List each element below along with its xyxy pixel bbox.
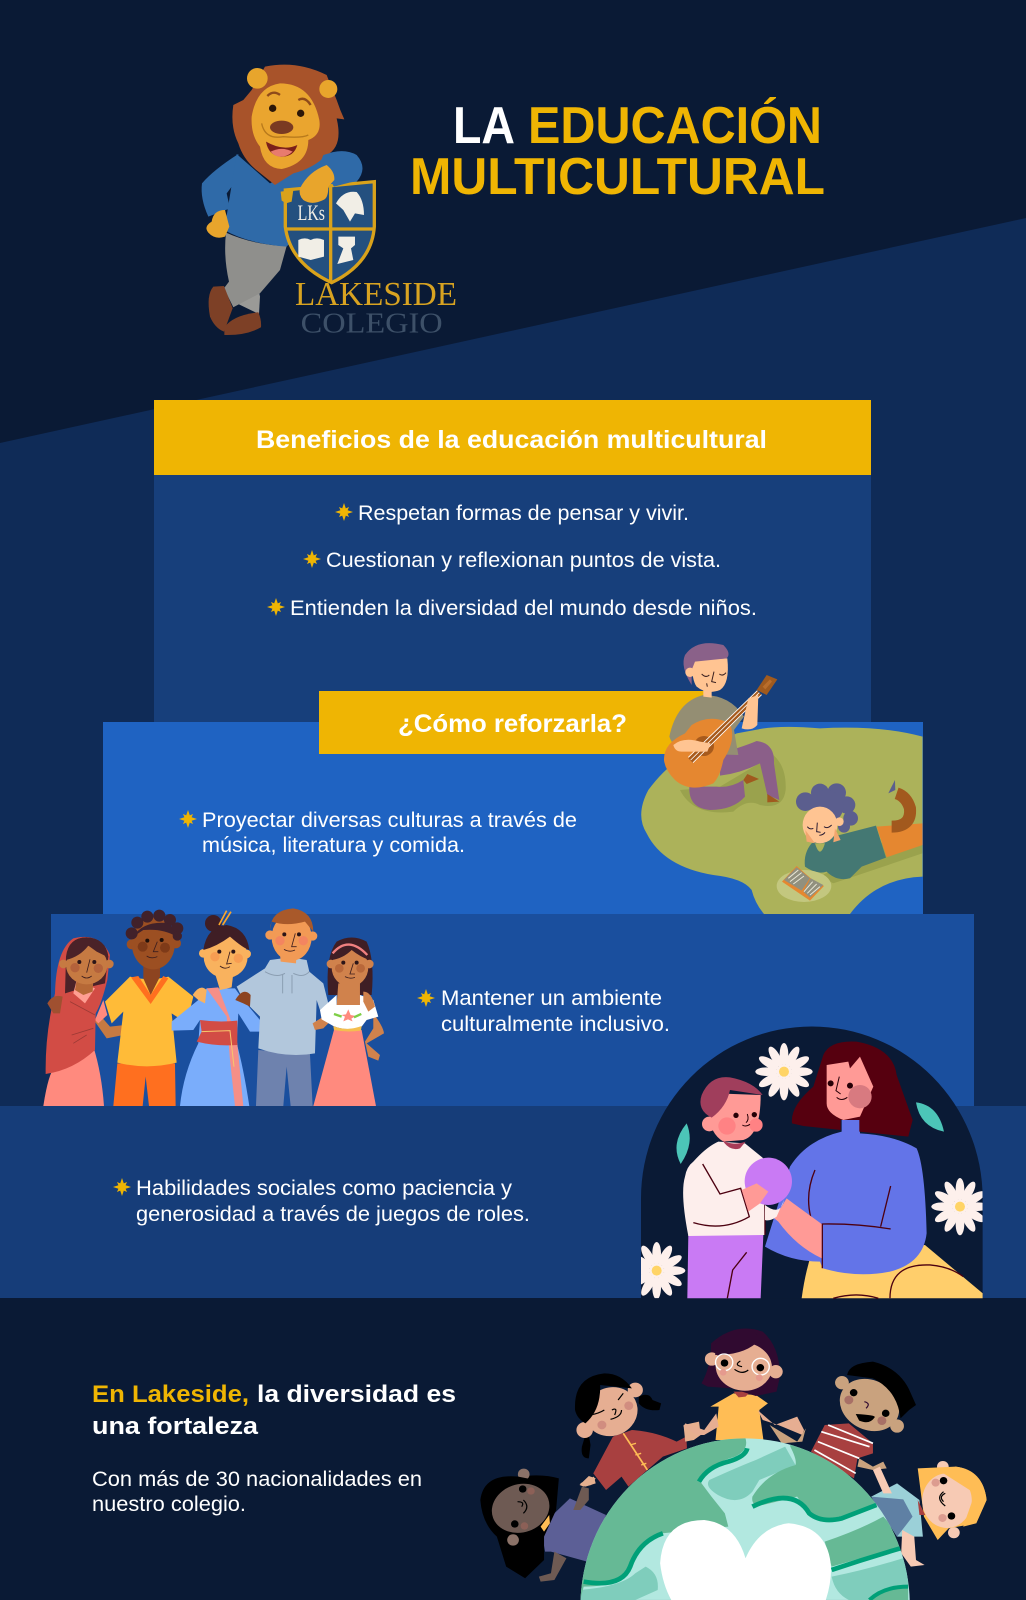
illustration: children with guitar and book	[641, 643, 923, 914]
panel: social skills	[0, 1106, 1026, 1299]
blonde child	[871, 1461, 987, 1567]
title: LA	[453, 97, 515, 155]
child face	[803, 807, 837, 843]
diagonal background band	[0, 218, 1026, 1299]
child with dark skin	[480, 1469, 606, 1582]
title	[410, 97, 825, 206]
reading child	[796, 780, 923, 879]
mascot face	[252, 83, 320, 169]
mascot left hand	[206, 210, 229, 238]
bullet: reinforcement text: música, literatura y comida.	[202, 834, 465, 857]
mascot mane	[232, 65, 344, 185]
wordmark COLEGIO: COLEGIO	[301, 309, 443, 340]
panel: inclusive environment	[51, 914, 974, 1106]
illustration: children holding hands around the globe	[480, 1329, 987, 1600]
footer text: nuestro colegio.	[92, 1493, 246, 1516]
footer heading: una fortaleza	[92, 1413, 259, 1440]
bullet: inclusive text: Mantener un ambiente	[441, 987, 662, 1010]
globe continents	[580, 1437, 746, 1600]
guitarist	[664, 643, 779, 810]
daisies and leaves	[628, 1043, 989, 1299]
child in grey hoodie	[193, 908, 328, 1106]
mascot boots	[209, 286, 261, 335]
title: EDUCACIÓN	[528, 97, 822, 155]
child legs	[877, 823, 923, 857]
benefits list: Cuestionan y reflexionan puntos de vista.	[326, 549, 721, 572]
title: MULTICULTURAL	[410, 148, 825, 206]
child in yellow shirt	[105, 910, 193, 1106]
open book	[777, 866, 831, 902]
bullet: inclusive text: culturalmente inclusivo.	[441, 1013, 670, 1036]
heading: how to reinforce: ¿Cómo reforzarla?	[398, 710, 627, 738]
child in striped shirt	[811, 1362, 916, 1478]
mother	[765, 1041, 983, 1298]
benefits list: Entienden la diversidad del mundo desde niños.	[290, 597, 757, 620]
green ground	[641, 727, 923, 914]
mascot sleeve and hand	[281, 152, 362, 203]
child in red jacket	[575, 1373, 701, 1490]
bullet: reinforcement text: Proyectar diversas culturas a través de	[202, 809, 577, 832]
benefits list	[267, 502, 757, 620]
globe shoreline shading	[584, 1448, 747, 1583]
footer text: Con más de 30 nacionalidades en	[92, 1468, 422, 1491]
child	[683, 1077, 792, 1298]
bullet: social skills text	[113, 1177, 530, 1226]
crest book	[298, 238, 324, 260]
heading: benefits	[154, 400, 871, 475]
mascot ears	[247, 68, 337, 98]
crest monogram: LKs	[298, 200, 325, 225]
globe	[580, 1437, 911, 1600]
bullet: reinforcement text	[179, 809, 577, 857]
bullet: social skills text: Habilidades sociales como paciencia y	[136, 1177, 513, 1200]
dark arch	[641, 1026, 983, 1298]
illustration: mother and child with ball	[628, 1026, 989, 1299]
crest lion head	[336, 192, 364, 222]
guitar	[664, 719, 732, 788]
footer heading: En Lakeside,	[92, 1381, 249, 1408]
wordmark LAKESIDE: LAKESIDE	[295, 276, 457, 313]
heading: how to reinforce	[319, 691, 709, 754]
mascot legs	[224, 233, 287, 314]
child in blue kimono	[172, 911, 260, 1106]
benefits list: Respetan formas de pensar y vivir.	[358, 502, 689, 525]
child in red shawl	[43, 937, 125, 1106]
crest tower	[337, 237, 355, 264]
panel: reinforcement	[103, 722, 923, 914]
globe heart	[660, 1520, 831, 1600]
crest shield	[285, 182, 374, 283]
guitarist head	[692, 658, 728, 692]
guitarist shoes	[743, 774, 779, 802]
bullet: inclusive text	[417, 987, 670, 1036]
guitarist shirt	[669, 695, 744, 755]
footer heading	[92, 1381, 456, 1440]
bullet: social skills text: generosidad a través de juegos de roles.	[136, 1203, 530, 1226]
guitarist legs	[689, 780, 745, 810]
panel: footer	[0, 1298, 1026, 1600]
panel: benefits body	[154, 475, 871, 723]
illustration: group of diverse children	[43, 908, 384, 1106]
footer heading: la diversidad es	[257, 1381, 456, 1408]
logo: lion mascot and Lakeside crest	[202, 65, 457, 340]
child curly hair	[796, 783, 858, 833]
heading: benefits: Beneficios de la educación multicultural	[256, 426, 767, 454]
child with glasses	[684, 1329, 806, 1443]
child sweater	[805, 826, 886, 879]
globe water	[708, 1447, 795, 1500]
child in white blouse	[313, 937, 384, 1106]
footer text	[92, 1468, 422, 1516]
guitarist hands	[673, 740, 711, 752]
mascot jacket	[202, 151, 362, 247]
